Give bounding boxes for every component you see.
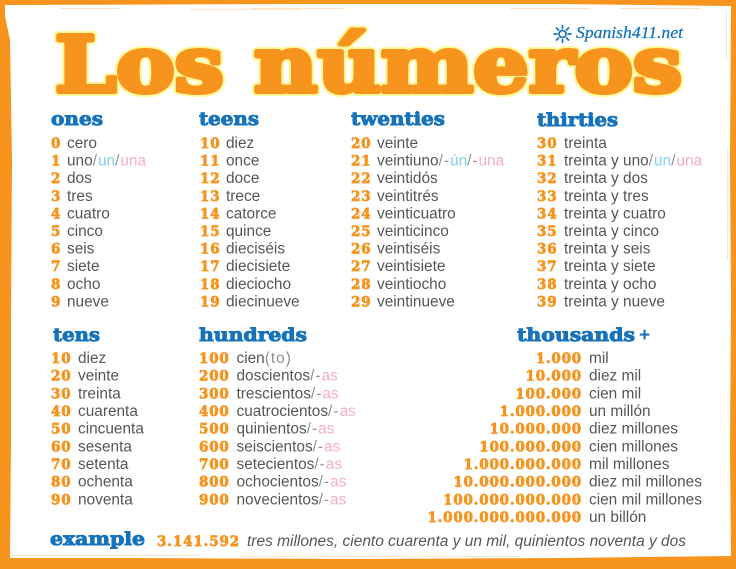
- column: teens: 15: [200, 224, 220, 240]
- column: teens: trece: [226, 188, 260, 205]
- column: hundreds: 100: [199, 351, 230, 367]
- column: ones: cinco: [67, 223, 103, 240]
- column: tens: 70: [51, 457, 71, 473]
- column: tens: cincuenta: [78, 421, 144, 438]
- column: teens: 14: [200, 206, 220, 222]
- column: teens: 10: [200, 136, 220, 152]
- column: thousands: cien mil: [589, 385, 641, 402]
- column: thirties: 36: [537, 242, 557, 258]
- column: thirties: treinta y tres: [564, 188, 649, 205]
- column: hundreds: 200: [199, 369, 230, 385]
- column: ones: 6: [51, 242, 61, 258]
- column: ones: seis: [67, 241, 95, 258]
- column: twenties: 29: [351, 294, 371, 310]
- column: thirties: treinta y dos: [564, 170, 648, 187]
- heading: thousands +: thousands: [517, 326, 635, 346]
- column: thirties: 37: [537, 259, 557, 275]
- column: twenties: 20: [351, 136, 371, 152]
- column: ones: dos: [67, 170, 92, 187]
- column: ones: cuatro: [67, 205, 110, 222]
- column: thirties: treinta y uno/un/una: [564, 153, 703, 170]
- column: teens: quince: [226, 223, 271, 240]
- column: tens: sesenta: [78, 438, 132, 455]
- column: ones: [51, 110, 146, 310]
- column: hundreds: novecientos/-as: [236, 491, 347, 508]
- column: thousands: diez mil: [589, 368, 641, 385]
- column: teens: 11: [200, 154, 220, 170]
- column: ones: 1: [51, 154, 61, 170]
- column: tens: 30: [51, 386, 71, 402]
- column: hundreds: 600: [199, 439, 230, 455]
- column: twenties: veintisiete: [377, 258, 445, 275]
- column: ones: 7: [51, 259, 61, 275]
- column: teens: 17: [200, 259, 220, 275]
- column: teens: catorce: [226, 205, 276, 222]
- column: tens: [51, 326, 144, 508]
- column: hundreds: setecientos/-as: [236, 456, 342, 473]
- column: thousands: 10.000.000.000: [453, 475, 582, 491]
- column: tens: setenta: [78, 456, 129, 473]
- column: thousands: 1.000.000.000.000: [427, 510, 582, 526]
- column: tens: diez: [78, 350, 106, 367]
- column: ones: ocho: [67, 276, 100, 293]
- column: twenties: veintiocho: [377, 276, 446, 293]
- column: thousands: 1.000.000.000: [464, 457, 582, 473]
- title: Los números: [55, 20, 682, 110]
- column: twenties: 26: [351, 242, 371, 258]
- column: thousands: un billón: [589, 509, 646, 526]
- column: thousands: 100.000.000.000: [443, 492, 582, 508]
- column: twenties: 21: [351, 154, 371, 170]
- column: tens: noventa: [78, 491, 133, 508]
- heading: twenties: twenties: [351, 110, 445, 130]
- column: teens: 13: [200, 189, 220, 205]
- heading: hundreds: hundreds: [199, 326, 307, 346]
- column: thousands: mil millones: [589, 456, 670, 473]
- column: tens: veinte: [78, 368, 119, 385]
- column: twenties: 23: [351, 189, 371, 205]
- column: hundreds: ochocientos/-as: [236, 474, 347, 491]
- column: tens: 40: [51, 404, 71, 420]
- column: thirties: treinta y nueve: [564, 293, 665, 310]
- column: thousands: diez millones: [589, 421, 678, 438]
- column: teens: [199, 110, 300, 310]
- column: teens: dieciocho: [226, 276, 291, 293]
- column: ones: siete: [67, 258, 100, 275]
- column: thousands: 10.000.000: [489, 422, 582, 438]
- column: thirties: 34: [537, 206, 557, 222]
- column: thousands: cien millones: [589, 438, 678, 455]
- column: teens: dieciséis: [226, 241, 285, 258]
- title: Los números: [55, 20, 682, 110]
- column: hundreds: 800: [199, 475, 230, 491]
- column: tens: 10: [51, 351, 71, 367]
- column: tens: 50: [51, 422, 71, 438]
- column: thousands: diez mil millones: [589, 474, 702, 491]
- column: tens: 20: [51, 369, 71, 385]
- column: teens: diecinueve: [226, 293, 300, 310]
- column: thirties: treinta y siete: [564, 258, 656, 275]
- column: thirties: treinta: [564, 135, 607, 152]
- example line: [50, 530, 686, 550]
- logo text: Spanish411.net: [576, 23, 684, 42]
- heading: example: example: [50, 530, 145, 550]
- logo: Spanish411.net: [554, 23, 684, 43]
- column: thirties: 32: [537, 171, 557, 187]
- heading: ones: ones: [51, 110, 103, 130]
- column: hundreds: 400: [199, 404, 230, 420]
- column: teens: 18: [200, 277, 220, 293]
- example words: tres millones, ciento cuarenta y un mil, quinientos noventa y dos: [247, 533, 686, 550]
- column: teens: 19: [200, 294, 220, 310]
- column: hundreds: cien(to): [236, 350, 292, 367]
- column: ones: 9: [51, 294, 61, 310]
- column: thirties: 33: [537, 189, 557, 205]
- column: teens: diecisiete: [226, 258, 290, 275]
- column: ones: 3: [51, 189, 61, 205]
- column: thirties: treinta y ocho: [564, 276, 656, 293]
- column: hundreds: doscientos/-as: [236, 368, 338, 385]
- column: ones: uno/un/una: [67, 153, 146, 170]
- column: hundreds: quinientos/-as: [236, 421, 335, 438]
- column: twenties: veintiséis: [377, 241, 441, 258]
- column: ones: 8: [51, 277, 61, 293]
- column: thousands: 1.000.000: [500, 404, 582, 420]
- column: thousands: 100.000: [515, 386, 582, 402]
- column: twenties: veintidós: [377, 170, 438, 187]
- heading: tens: tens: [53, 326, 100, 346]
- icon: sun: [554, 25, 572, 43]
- column: twenties: 22: [351, 171, 371, 187]
- column: thirties: 35: [537, 224, 557, 240]
- column: tens: 60: [51, 439, 71, 455]
- column: hundreds: 700: [199, 457, 230, 473]
- column: ones: cero: [67, 135, 97, 152]
- column: teens: doce: [226, 170, 259, 187]
- column: ones: 4: [51, 206, 61, 222]
- column: ones: 0: [51, 136, 61, 152]
- column: twenties: 28: [351, 277, 371, 293]
- column: hundreds: seiscientos/-as: [236, 438, 341, 455]
- column: hundreds: [199, 326, 356, 508]
- column: teens: 16: [200, 242, 220, 258]
- column: twenties: 24: [351, 206, 371, 222]
- column: tens: ochenta: [78, 474, 133, 491]
- column: tens: 80: [51, 475, 71, 491]
- column: hundreds: 500: [199, 422, 230, 438]
- column: thousands: un millón: [589, 403, 651, 420]
- column: thousands: 1.000: [536, 351, 582, 367]
- heading: thirties: thirties: [537, 111, 618, 131]
- column: teens: diez: [226, 135, 254, 152]
- column: thirties: 30: [537, 136, 557, 152]
- heading: teens: teens: [199, 110, 259, 130]
- column: twenties: 25: [351, 224, 371, 240]
- column: thirties: 31: [537, 154, 557, 170]
- column: ones: 5: [51, 224, 61, 240]
- column: hundreds: 900: [199, 492, 230, 508]
- example number: 3.141.592: [157, 534, 240, 550]
- column: ones: nueve: [67, 293, 109, 310]
- column: twenties: veinte: [377, 135, 418, 152]
- column: ones: tres: [67, 188, 93, 205]
- column: thousands: 100.000.000: [479, 439, 582, 455]
- column: tens: treinta: [78, 385, 121, 402]
- column: twenties: 27: [351, 259, 371, 275]
- column: thirties: 39: [537, 294, 557, 310]
- column: thousands: [427, 325, 702, 526]
- column: hundreds: cuatrocientos/-as: [236, 403, 356, 420]
- column: tens: cuarenta: [78, 403, 138, 420]
- column: teens: once: [226, 153, 259, 170]
- column: thousands: +: [639, 325, 650, 346]
- column: twenties: veintinueve: [377, 293, 455, 310]
- column: thirties: treinta y seis: [564, 241, 651, 258]
- column: twenties: veintitrés: [377, 188, 439, 205]
- column: twenties: veintiuno/-ún/-una: [377, 153, 505, 170]
- column: twenties: veinticinco: [377, 223, 449, 240]
- column: hundreds: trescientos/-as: [236, 385, 339, 402]
- column: thousands: 10.000: [526, 369, 582, 385]
- column: thirties: [537, 111, 703, 310]
- column: ones: 2: [51, 171, 61, 187]
- column: hundreds: 300: [199, 386, 230, 402]
- column: thousands: cien mil millones: [589, 491, 702, 508]
- column: thirties: treinta y cinco: [564, 223, 659, 240]
- column: twenties: veinticuatro: [377, 205, 456, 222]
- column: twenties: [351, 110, 505, 310]
- column: thousands: mil: [589, 350, 609, 367]
- column: thirties: 38: [537, 277, 557, 293]
- column: tens: 90: [51, 492, 71, 508]
- column: teens: 12: [200, 171, 220, 187]
- column: thirties: treinta y cuatro: [564, 205, 666, 222]
